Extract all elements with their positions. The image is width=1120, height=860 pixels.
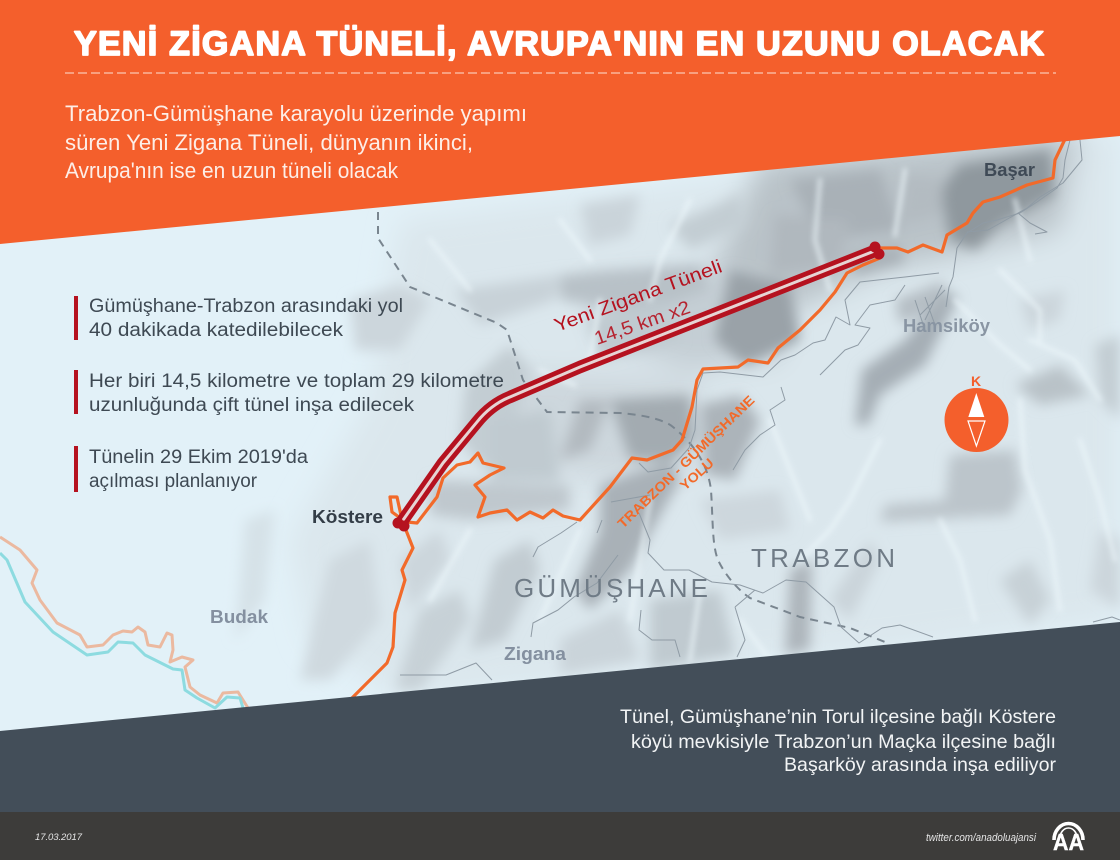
- tunnel label: 14,5 km x2: [592, 297, 693, 350]
- thin rivers: [400, 140, 1120, 680]
- bullet 3: [74, 446, 308, 492]
- panel: dark bottom band: [0, 622, 1120, 812]
- bottom text: köyü mevkisiyle Trabzon’un Maçka ilçesine bağlı: [631, 731, 1056, 753]
- icon: AA logo: AA: [1053, 829, 1084, 855]
- intro text: Avrupa'nın ise en uzun tüneli olacak: [65, 158, 399, 183]
- province border: [378, 212, 885, 642]
- title: YENİ ZİGANA TÜNELİ, AVRUPA'NIN EN UZUNU OLACAK: [74, 25, 1044, 63]
- intro text: [65, 101, 527, 183]
- bullet 2: Her biri 14,5 kilometre ve toplam 29 kilometre: [89, 371, 504, 392]
- panel: footer bar: [0, 812, 1120, 860]
- place labels: Zigana: [504, 644, 567, 664]
- road: Trabzon-Gümüşhane: [345, 135, 1067, 705]
- intro text: Trabzon-Gümüşhane karayolu üzerinde yapımı: [65, 101, 527, 126]
- bullet 1: Gümüşhane-Trabzon arasındaki yol: [89, 296, 403, 317]
- place labels: Köstere: [312, 507, 383, 527]
- panel: terrain map: [235, 130, 1120, 700]
- place labels: Hamsiköy: [903, 316, 990, 336]
- date: 17.03.2017: [35, 832, 83, 843]
- salmon river: [0, 537, 248, 708]
- bullet 1: [74, 296, 403, 341]
- place labels: [210, 160, 1035, 664]
- bottom text: [620, 706, 1056, 776]
- cyan river: [0, 553, 243, 708]
- road label: TRABZON - GÜMÜŞHANE: [615, 393, 757, 531]
- bottom text: Tünel, Gümüşhane’nin Torul ilçesine bağlı Köstere: [620, 706, 1056, 728]
- place labels: Başar: [984, 160, 1035, 180]
- tunnel label: [552, 256, 725, 350]
- road label: YOLU: [677, 455, 717, 493]
- bullet 3: açılması planlanıyor: [89, 471, 258, 492]
- social handle: twitter.com/anadoluajansi: [926, 832, 1036, 844]
- bullet 3: Tünelin 29 Ekim 2019'da: [89, 447, 308, 468]
- icon: north compass: K: [971, 373, 981, 389]
- panel: orange header band: [0, 0, 1120, 244]
- province labels: TRABZON: [751, 543, 895, 573]
- bullet 1: 40 dakikada katedilebilecek: [89, 320, 344, 341]
- bullet 2: uzunluğunda çift tünel inşa edilecek: [89, 395, 415, 416]
- bullet 2: [74, 370, 504, 416]
- tunnel line: [392, 242, 884, 532]
- province labels: GÜMÜŞHANE: [514, 573, 708, 603]
- bottom text: Başarköy arasında inşa ediliyor: [784, 754, 1056, 776]
- intro text: süren Yeni Zigana Tüneli, dünyanın ikinci,: [65, 130, 473, 155]
- province labels: [514, 543, 895, 603]
- place labels: Budak: [210, 607, 269, 627]
- tunnel label: Yeni Zigana Tüneli: [552, 256, 725, 337]
- icon: north compass: [944, 373, 1008, 452]
